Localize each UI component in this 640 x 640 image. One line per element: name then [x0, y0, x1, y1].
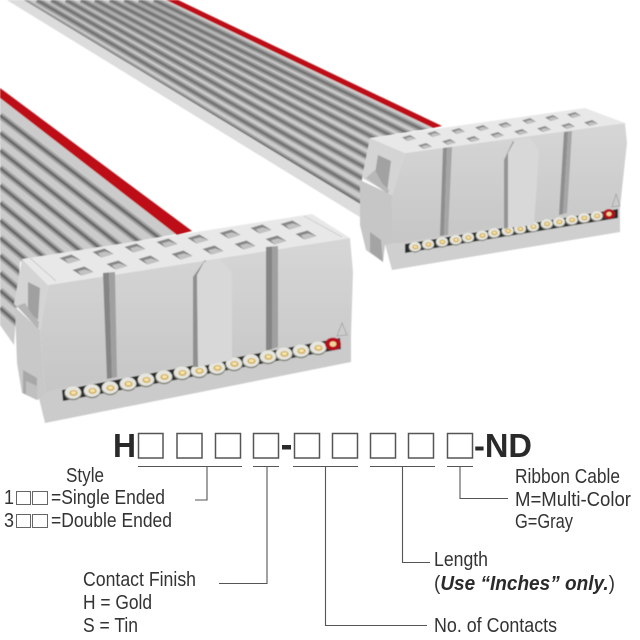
- lower connector latch tab: [193, 259, 232, 367]
- part number: suffix ND: -ND: [474, 427, 532, 464]
- connector: lower left: [14, 214, 353, 423]
- connector: upper right: [360, 108, 627, 270]
- lower connector lower-left end: [15, 307, 45, 400]
- label: style: [4, 465, 172, 532]
- part number: dash: [282, 445, 291, 450]
- part number: prefix H: H: [113, 427, 136, 464]
- label: length: (Use “Inches” only.): [434, 573, 615, 595]
- ribbon cable: lower: [0, 88, 192, 345]
- lower connector lower strip: [38, 333, 351, 423]
- upper connector slots: [440, 131, 572, 236]
- label: contact finish: H = Gold: [83, 592, 152, 614]
- part number boxes: [138, 434, 472, 458]
- bracket lines and leaders: [138, 466, 508, 626]
- upper connector top face: [370, 108, 625, 153]
- lower connector front face: [40, 238, 353, 392]
- label: ribbon cable: Ribbon Cable: [515, 466, 620, 488]
- label: contact finish: S = Tin: [83, 615, 138, 637]
- upper connector lower-left end: [360, 180, 393, 262]
- upper connector front face: [392, 123, 627, 243]
- upper connector side face: [362, 138, 405, 195]
- lower connector pin row: [62, 338, 341, 401]
- upper connector triangle mark: [612, 194, 620, 207]
- lower connector top face: [22, 214, 350, 285]
- illustration: ribbon cables and connectors: [0, 0, 628, 424]
- label: ribbon cable: M=Multi-Color: [515, 489, 631, 511]
- upper connector lower strip: [385, 205, 620, 270]
- lower connector side face: [14, 259, 48, 330]
- label: style: 3: [4, 510, 14, 532]
- ribbon cable: upper: [8, 0, 442, 217]
- label: style: Style: [66, 465, 104, 487]
- label: contact finish: [83, 569, 196, 637]
- lower connector slots: [103, 246, 278, 379]
- label: contact finish: Contact Finish: [83, 569, 196, 591]
- label: style: =Single Ended: [51, 487, 165, 509]
- label: ribbon cable: G=Gray: [515, 511, 573, 533]
- lower connector triangle mark: [337, 323, 347, 336]
- label: number of contacts: No. of Contacts: [434, 615, 557, 637]
- label: style: 1: [4, 487, 14, 509]
- label: style: =Double Ended: [51, 510, 172, 532]
- upper connector pin row: [405, 209, 618, 253]
- label: length: [434, 549, 615, 595]
- label: length: Length: [434, 549, 488, 571]
- upper connector latch tab: [504, 138, 539, 229]
- label: ribbon cable: [515, 466, 631, 533]
